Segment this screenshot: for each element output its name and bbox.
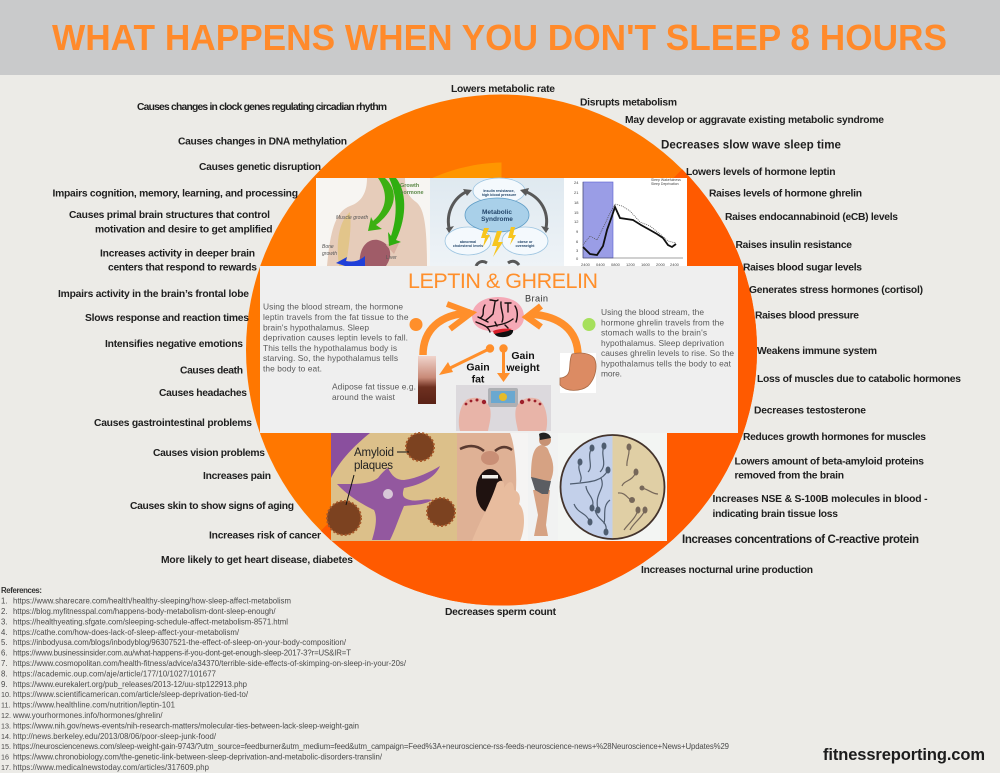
- chart axis labels: 9: [576, 229, 579, 234]
- labels: right side effects: Raises insulin resistance: [736, 240, 852, 251]
- labels: right side effects: Generates stress hormones (cortisol): [749, 285, 923, 296]
- adipose caption: Adipose fat tissue e.g.: [332, 382, 416, 392]
- references list: https://www.cosmopolitan.com/health-fitness/advice/a34370/terrible-side-effects-of-skimping-on-sleep-in-your-20s/: [13, 659, 407, 668]
- references list: http://news.berkeley.edu/2013/08/06/poor-sleep-junk-food/: [13, 732, 217, 741]
- labels: right side effects: Raises endocannabinoid (eCB) levels: [725, 212, 898, 223]
- photo: metabolic syndrome diagram: overweight: [516, 244, 535, 248]
- chart axis labels: 6: [576, 239, 579, 244]
- labels: left side effects: Impairs activity in the brain’s frontal lobe: [58, 289, 249, 300]
- references list: https://academic.oup.com/aje/article/177/10/1027/101677: [13, 669, 216, 678]
- ghrelin text block: [601, 307, 734, 379]
- site credit: fitnessreporting.com: [823, 746, 985, 764]
- chart axis labels: 18: [574, 200, 579, 205]
- gain fat label: [466, 362, 490, 386]
- references list: 5.: [1, 638, 8, 647]
- references list: 16: [1, 753, 9, 762]
- title banner: [0, 0, 1000, 75]
- chart axis labels: 21: [574, 190, 579, 195]
- labels: left side effects: Causes vision problems: [153, 448, 265, 459]
- references list: https://inbodyusa.com/blogs/inbodyblog/96307521-the-effect-of-sleep-on-your-body-composition/: [13, 638, 347, 647]
- labels: right side effects: Increases concentrations of C-reactive protein: [682, 534, 919, 546]
- references list: 15.: [1, 742, 11, 751]
- photo: growth hormone body: Muscle growth: [336, 215, 368, 221]
- gain fat label: Gain: [466, 362, 490, 374]
- arrow: brain to fat: [439, 344, 494, 375]
- leptin text block: Using the blood stream, the hormone: [263, 302, 403, 312]
- labels: left side effects: Impairs cognition, memory, learning, and processing: [52, 188, 298, 200]
- labels: left side effects: Increases risk of cancer: [209, 530, 321, 542]
- labels: right side effects: Decreases testosterone: [754, 406, 866, 416]
- sleep period shading: [583, 182, 613, 258]
- labels: right side effects: Decreases slow wave sleep time: [661, 138, 842, 152]
- ghrelin text block: stomach walls to the brain's: [601, 328, 707, 338]
- photo: metabolic syndrome diagram: high blood pressure: [482, 193, 516, 197]
- ghrelin text block: hypothalamus. Sleep deprivation: [601, 338, 724, 348]
- leptin text block: [263, 302, 409, 373]
- ghrelin text block: hypothalamus tells the body to eat: [601, 358, 732, 368]
- photo: metabolic syndrome diagram: Metabolic: [482, 209, 512, 216]
- references list: 12.: [1, 711, 11, 720]
- photo: growth hormone body: Bone: [322, 244, 334, 250]
- label: growth hormone: Growth: [400, 183, 420, 189]
- leptin text block: starving. So, the hypothalamus tells: [263, 353, 398, 363]
- arrow: ghrelin to brain: [527, 306, 578, 356]
- references list: [1, 586, 729, 772]
- chart axis labels: 1200: [626, 262, 636, 267]
- labels: left side effects: Causes gastrointestinal problems: [94, 418, 252, 429]
- references list: 8.: [1, 669, 8, 678]
- photo: growth hormone body: growth: [322, 251, 337, 257]
- labels: right side effects: Disrupts metabolism: [580, 98, 677, 108]
- ghrelin text block: Using the blood stream, the: [601, 307, 704, 317]
- ghrelin text block: hormone ghrelin travels from the: [601, 317, 724, 327]
- labels: right side effects: removed from the brain: [734, 470, 844, 482]
- references list: https://www.businessinsider.com.au/what-happens-if-you-dont-get-enough-sleep-2017-3?r=US&IR=T: [13, 649, 351, 658]
- ghrelin text block: more.: [601, 369, 622, 379]
- photo: amyloid plaques: plaques: [354, 460, 393, 472]
- references list: 14.: [1, 732, 11, 741]
- leptin text block: the body to eat.: [263, 363, 322, 373]
- central orange circle: [246, 94, 757, 606]
- chart axis labels: 2400: [581, 262, 591, 267]
- references list: https://www.scientificamerican.com/article/sleep-deprivation-tied-to/: [13, 690, 249, 699]
- labels: right side effects: Increases nocturnal urine production: [641, 565, 813, 576]
- chart: cortisol line chart: [564, 178, 687, 267]
- labels: right side effects: Loss of muscles due to catabolic hormones: [757, 374, 961, 385]
- references list: https://healthyeating.sfgate.com/sleeping-schedule-affect-metabolism-8571.html: [13, 618, 288, 626]
- photo: growth hormone body: [316, 178, 430, 266]
- references heading: References:: [1, 586, 42, 595]
- labels: left side effects: Causes skin to show signs of aging: [130, 501, 294, 512]
- labels: left side effects: Slows response and reaction times: [85, 313, 249, 324]
- photo: overweight man: [528, 433, 558, 541]
- references list: https://www.healthline.com/nutrition/leptin-101: [13, 701, 175, 710]
- photo: yawning man: [457, 433, 528, 541]
- labels: left side effects: Causes genetic disruption: [199, 162, 321, 173]
- photo: metabolic syndrome diagram: Insulin resistance,: [483, 189, 515, 193]
- references list: www.yourhormones.info/hormones/ghrelin/: [12, 711, 163, 720]
- chart axis labels: 3: [576, 248, 579, 253]
- title: WHAT HAPPENS WHEN YOU DON'T SLEEP 8 HOURS: [52, 17, 947, 58]
- references list: 9.: [1, 680, 8, 689]
- references list: 6.: [1, 649, 8, 658]
- chart axis labels: 15: [574, 210, 579, 215]
- panel: leptin and ghrelin: [260, 266, 738, 433]
- references list: https://www.nih.gov/news-events/nih-research-matters/molecular-ties-between-lack-sleep-weight-gain: [13, 721, 359, 730]
- references list: 13.: [1, 721, 11, 730]
- leptin text block: This tells the hypothalamus body is: [263, 343, 397, 353]
- chart axis labels: 2400: [670, 262, 680, 267]
- references list: https://www.sharecare.com/health/healthy-sleeping/how-sleep-affect-metabolism: [13, 596, 291, 606]
- references list: https://www.eurekalert.org/pub_releases/2013-12/uu-stp122913.php: [13, 680, 248, 689]
- labels: right side effects: May develop or aggravate existing metabolic syndrome: [625, 115, 884, 126]
- labels: right side effects: Raises blood pressure: [755, 310, 859, 322]
- chart: cortisol line chart: Sleep Deprivation: [651, 182, 679, 186]
- photo: metabolic syndrome diagram: Syndrome: [481, 216, 513, 223]
- labels: right side effects: Raises blood sugar levels: [743, 262, 862, 274]
- references list: 10.: [1, 690, 11, 699]
- arrow: brain to weight: [497, 344, 510, 382]
- labels: left side effects: Causes death: [180, 366, 243, 376]
- labels: left side effects: Intensifies negative emotions: [105, 339, 243, 350]
- leptin text block: brain's hypothalamus. Sleep: [263, 322, 369, 332]
- labels: left side effects: Causes headaches: [159, 388, 247, 399]
- photo: growth hormone body: hormone: [400, 190, 424, 196]
- photo: metabolic syndrome diagram: obese or: [518, 240, 533, 244]
- chart axis labels: 0: [576, 256, 579, 261]
- photo: growth hormone body: Liver: [386, 255, 397, 261]
- references list: https://cathe.com/how-does-lack-of-sleep-affect-your-metabolism/: [13, 628, 240, 637]
- references list: 17.: [1, 763, 11, 772]
- labels: left side effects: [52, 102, 387, 566]
- photo: metabolic syndrome diagram: abnormal: [460, 240, 476, 244]
- labels: left side effects: Causes primal brain structures that control: [69, 210, 270, 221]
- labels: right side effects: Lowers metabolic rate: [451, 84, 555, 95]
- references list: https://neurosciencenews.com/sleep-weight-gain-9743/?utm_source=feedburner&utm_medium=feed&utm_campaign=Feed%3A+neuroscience-rss-feeds-neuroscience-news+%28Neuroscience+News+Updates%29: [13, 742, 729, 751]
- references list: 1.: [1, 596, 8, 606]
- labels: left side effects: motivation and desire to get amplified: [95, 224, 272, 236]
- photo: amyloid plaques: Amyloid: [354, 447, 394, 459]
- illustration: sperm count comparison: [558, 433, 667, 541]
- photo: amyloid plaques: [327, 433, 457, 541]
- references list: 4.: [1, 628, 8, 637]
- adipose caption: [332, 382, 416, 402]
- references list: 11.: [1, 701, 10, 710]
- chart: cortisol line chart: Sleep Wakefulness: [651, 178, 681, 182]
- labels: left side effects: centers that respond to rewards: [108, 262, 257, 274]
- photo: adipose tissue: [418, 356, 436, 404]
- gain weight label: weight: [505, 362, 540, 374]
- labels: right side effects: Increases NSE & S-100B molecules in blood -: [712, 494, 928, 505]
- chart axis labels: 0800: [611, 262, 621, 267]
- chart axis labels: 24: [574, 180, 579, 185]
- chart axis labels: 1600: [641, 262, 651, 267]
- ghrelin text block: causes ghrelin levels to rise. So the: [601, 348, 734, 358]
- references list: https://blog.myfitnesspal.com/happens-body-metabolism-dont-sleep-enough/: [13, 607, 276, 616]
- gain weight label: Gain: [511, 350, 535, 362]
- chart axis labels: 2000: [656, 262, 666, 267]
- icon: brain: [472, 297, 524, 337]
- labels: left side effects: Causes changes in clock genes regulating circadian rhythm: [137, 102, 387, 113]
- photo: bathroom scale with feet: [456, 385, 551, 431]
- labels: left side effects: Increases pain: [203, 471, 271, 482]
- chart axis labels: [574, 180, 680, 267]
- references list: https://www.medicalnewstoday.com/articles/317609.php: [13, 763, 210, 772]
- references list: 3.: [1, 618, 8, 626]
- brain label: Brain: [525, 294, 548, 304]
- labels: right side effects: indicating brain tissue loss: [712, 509, 838, 520]
- marker: leptin dot: [410, 318, 422, 331]
- chart axis labels: 0400: [596, 262, 606, 267]
- labels: right side effects: Lowers amount of beta-amyloid proteins: [734, 456, 924, 468]
- labels: right side effects: Reduces growth hormones for muscles: [743, 432, 926, 443]
- leptin text block: leptin travels from the fat tissue to the: [263, 312, 409, 322]
- labels: left side effects: More likely to get heart disease, diabetes: [161, 555, 353, 566]
- labels: left side effects: Increases activity in deeper brain: [100, 248, 255, 260]
- labels: left side effects: Causes changes in DNA methylation: [178, 136, 347, 148]
- icon: stomach: [560, 353, 596, 393]
- labels: right side effects: Decreases sperm count: [445, 607, 557, 618]
- labels: right side effects: [445, 84, 961, 618]
- references list: 7.: [1, 659, 8, 668]
- chart axis labels: 12: [574, 219, 579, 224]
- labels: right side effects: Weakens immune system: [757, 346, 877, 357]
- labels: right side effects: Lowers levels of hormone leptin: [686, 167, 836, 178]
- arrow: leptin to brain: [423, 304, 471, 355]
- adipose caption: around the waist: [332, 392, 396, 402]
- panel heading: LEPTIN & GHRELIN: [408, 269, 598, 293]
- references list: 2.: [1, 607, 8, 616]
- photo: metabolic syndrome diagram: cholesterol levels: [453, 244, 483, 248]
- leptin text block: deprivation causes leptin levels to fall.: [263, 332, 408, 342]
- marker: ghrelin dot: [582, 318, 596, 331]
- references list: https://www.chronobiology.com/the-genetic-link-between-sleep-deprivation-and-metabolic-disorders-translin/: [13, 753, 383, 762]
- gain weight label: [505, 350, 540, 374]
- photo: metabolic syndrome diagram: [430, 178, 564, 266]
- gain fat label: fat: [472, 374, 485, 386]
- labels: right side effects: Raises levels of hormone ghrelin: [709, 188, 862, 200]
